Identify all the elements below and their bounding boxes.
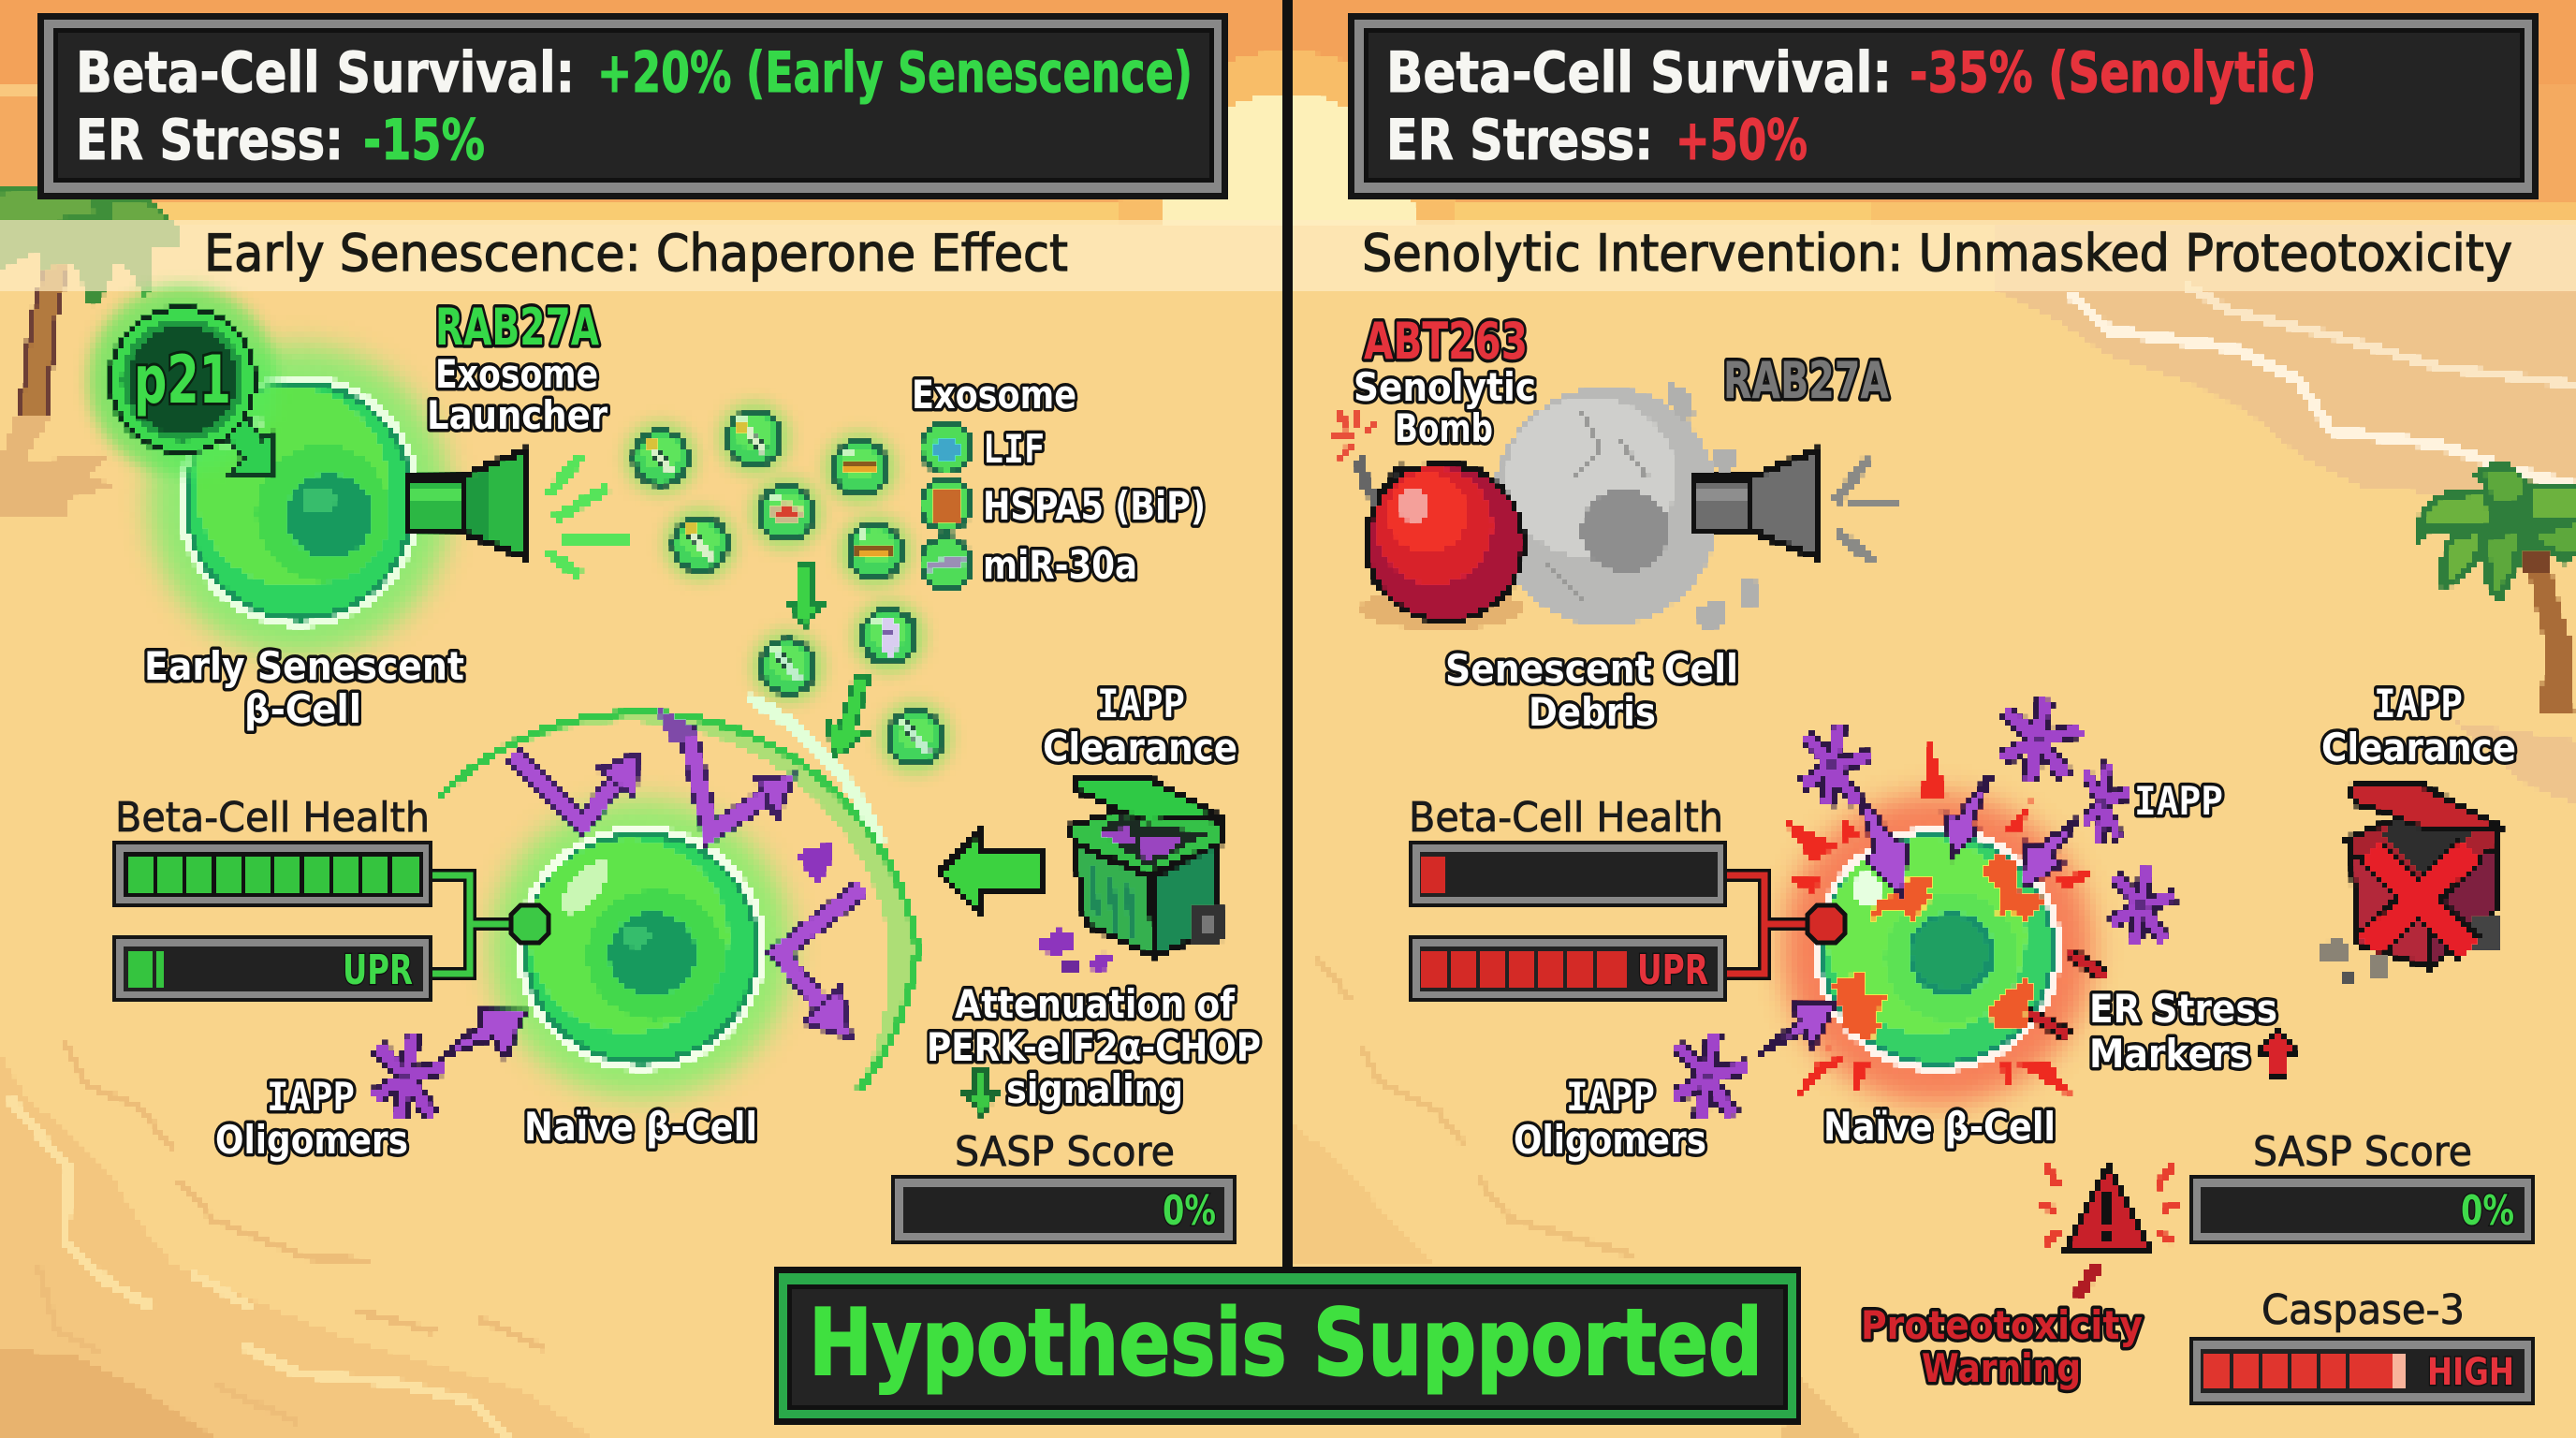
- label: Senolytic Bomb: Senolytic: [1354, 364, 1536, 410]
- label: Launcher: Launcher: [427, 392, 607, 438]
- icon: red trash bin crossed: [2319, 785, 2501, 981]
- legend: HSPA5 icon: [919, 477, 973, 532]
- icon: green trash bin: [1042, 779, 1224, 974]
- icon: ghost senescent cell debris: [1493, 384, 1758, 632]
- legend: LIF: LIF: [983, 426, 1045, 472]
- bar: SASP right: 0%: [2461, 1187, 2514, 1235]
- label: SASP score left: SASP Score: [955, 1128, 1175, 1176]
- stat: survival value: -35% (Senolytic): [1910, 40, 2317, 106]
- illustrations layer: [89, 286, 2501, 1297]
- label: Senolytic Bomb: [1354, 364, 1536, 451]
- arrow: oligomer to cell: [446, 1011, 525, 1058]
- label: Beta-Cell Health right: Beta-Cell Health: [1409, 794, 1723, 842]
- bar: Caspase-3: HIGH: [2427, 1351, 2514, 1394]
- IAPP oligomer stars right: [1676, 700, 2175, 1119]
- legend: miR-30a icon: [919, 536, 973, 591]
- ER stress dashes: [2027, 953, 2105, 1035]
- heading: senolytic intervention: Senolytic Intervention: Unmasked Proteotoxicity: [1362, 224, 2512, 283]
- label: early senescent beta cell: β-Cell: [244, 686, 361, 732]
- label: IAPP Clearance left: IAPP: [1097, 681, 1185, 726]
- label: Exosome legend title: Exosome: [912, 372, 1076, 418]
- connector: bars to cell right: [1727, 875, 1811, 974]
- label: Beta-Cell Health left: Beta-Cell Health: [115, 794, 430, 842]
- label: IAPP Oligomers left: Oligomers: [215, 1117, 408, 1163]
- connector: bars to cell left: [432, 875, 515, 974]
- label: attenuation text: signaling: [1006, 1066, 1183, 1112]
- label: attenuation text: [927, 981, 1261, 1112]
- exosome particles: [625, 403, 951, 773]
- icon: green RAB27A launcher: [402, 446, 530, 562]
- label: RAB27A grey: RAB27A: [1723, 351, 1889, 410]
- label: Proteotoxicity Warning: Warning: [1922, 1345, 2081, 1391]
- IAPP deflected arrows: [513, 707, 862, 1037]
- bar: SASP left: 0%: [1163, 1187, 1216, 1235]
- label: attenuation text: Attenuation of: [955, 981, 1236, 1027]
- label: attenuation text: PERK-eIF2α-CHOP: [927, 1024, 1261, 1070]
- label: ABT263: ABT263: [1364, 312, 1528, 371]
- launch streaks: [548, 457, 632, 576]
- icon: small down arrow: [965, 1071, 998, 1113]
- bar: health right: [1409, 841, 1727, 907]
- icon: grey launcher: [1690, 446, 1822, 562]
- arrow: exosomes to shield: [827, 674, 869, 756]
- label: IAPP right: IAPP: [2134, 778, 2223, 824]
- icon: naive beta cell (left): [491, 800, 791, 1096]
- label: Proteotoxicity Warning: Proteotoxicity: [1861, 1302, 2143, 1348]
- label: ER Stress Markers: ER Stress: [2089, 986, 2277, 1032]
- label: Senescent Cell Debris: [1445, 646, 1738, 735]
- bar: SASP left: [891, 1175, 1237, 1244]
- icon: up arrow: [2259, 1029, 2297, 1076]
- icon: warning triangle: [2039, 1166, 2179, 1297]
- label: ER Stress Markers: [2089, 986, 2277, 1077]
- bar: UPR left: [112, 935, 432, 1002]
- bar: UPR right: [1409, 935, 1727, 1002]
- label: Naive beta cell right: Naïve β-Cell: [1823, 1104, 2056, 1150]
- label: IAPP Oligomers right: IAPP: [1566, 1074, 1655, 1120]
- section title strip: right: [1293, 220, 2576, 291]
- stat: ER stress value: -15%: [363, 108, 485, 173]
- legend: LIF icon: [919, 420, 973, 475]
- node right: [1808, 905, 1845, 943]
- label: Naive beta cell left: Naïve β-Cell: [524, 1104, 757, 1150]
- bar: SASP right: [2189, 1175, 2535, 1244]
- label: IAPP Clearance right: [2321, 681, 2516, 770]
- verdict banner: Hypothesis Supported: [809, 1290, 1763, 1397]
- stat: ER stress value: +50%: [1676, 108, 1808, 173]
- connector: green line left: [432, 875, 515, 974]
- bar: health left: [112, 841, 432, 907]
- icon: early senescent cell: [150, 346, 449, 655]
- stat: survival label: Beta-Cell Survival:: [1386, 40, 1892, 106]
- IAPP attack arrows: [1760, 774, 2078, 1053]
- label: SASP score right: SASP Score: [2253, 1128, 2472, 1176]
- heading: early senescence: Early Senescence: Chaperone Effect: [204, 224, 1068, 283]
- grey launch streaks: [1837, 459, 1896, 562]
- label: IAPP Oligomers left: [215, 1074, 408, 1163]
- stat: survival label: Beta-Cell Survival:: [76, 40, 575, 106]
- label: ER Stress Markers: Markers: [2089, 1031, 2250, 1077]
- label: IAPP Clearance right: IAPP: [2374, 681, 2463, 726]
- icon: senolytic bomb: [1334, 408, 1527, 629]
- label: IAPP Oligomers right: Oligomers: [1514, 1117, 1706, 1163]
- label: early senescent beta cell: Early Senescent: [144, 643, 464, 689]
- stat: ER stress label: ER Stress:: [76, 108, 344, 173]
- bar: UPR left: UPR: [343, 946, 413, 994]
- bar: Caspase-3: [2189, 1337, 2535, 1405]
- connector: red line right: [1727, 875, 1811, 974]
- label: Proteotoxicity Warning: [1861, 1302, 2143, 1391]
- label: Caspase-3: Caspase-3: [2261, 1286, 2465, 1334]
- label: early senescent beta cell: [144, 643, 464, 732]
- bar: UPR right: UPR: [1637, 946, 1708, 994]
- label: RAB27A green: RAB27A: [435, 298, 599, 357]
- section title strip: left: [0, 220, 1283, 291]
- stat: survival value: +20% (Early Senescence): [597, 40, 1193, 106]
- node left: [511, 905, 549, 943]
- legend: miR-30a: miR-30a: [983, 542, 1137, 588]
- label: IAPP Clearance right: Clearance: [2321, 725, 2516, 770]
- p21 text: p21: [134, 342, 231, 418]
- central divider: [1282, 0, 1293, 1269]
- label: Senescent Cell Debris: Debris: [1529, 689, 1656, 735]
- label: IAPP Oligomers left: IAPP: [267, 1074, 355, 1120]
- label: Senolytic Bomb: Bomb: [1395, 405, 1493, 451]
- label: IAPP Oligomers right: [1514, 1074, 1706, 1163]
- label: Senescent Cell Debris: Senescent Cell: [1445, 646, 1738, 692]
- arrow: exosomes down: [788, 564, 824, 625]
- label: IAPP Clearance left: Clearance: [1043, 725, 1237, 770]
- panel: right stats: [1348, 13, 2539, 199]
- legend: HSPA5: HSPA5 (BiP): [983, 483, 1206, 529]
- label: IAPP Clearance left: [1043, 681, 1237, 770]
- stat: ER stress label: ER Stress:: [1386, 108, 1653, 173]
- IAPP oligomer star left: [374, 1034, 445, 1119]
- label: Exosome: Exosome: [435, 351, 598, 397]
- icon: damaged naive beta cell: [1781, 741, 2097, 1104]
- verdict banner: [774, 1267, 1801, 1425]
- icon: p21 badge: [89, 286, 276, 477]
- shield arc: [440, 697, 917, 1091]
- panel: left stats: [37, 13, 1228, 199]
- icon: big clearance arrow: [941, 831, 1045, 912]
